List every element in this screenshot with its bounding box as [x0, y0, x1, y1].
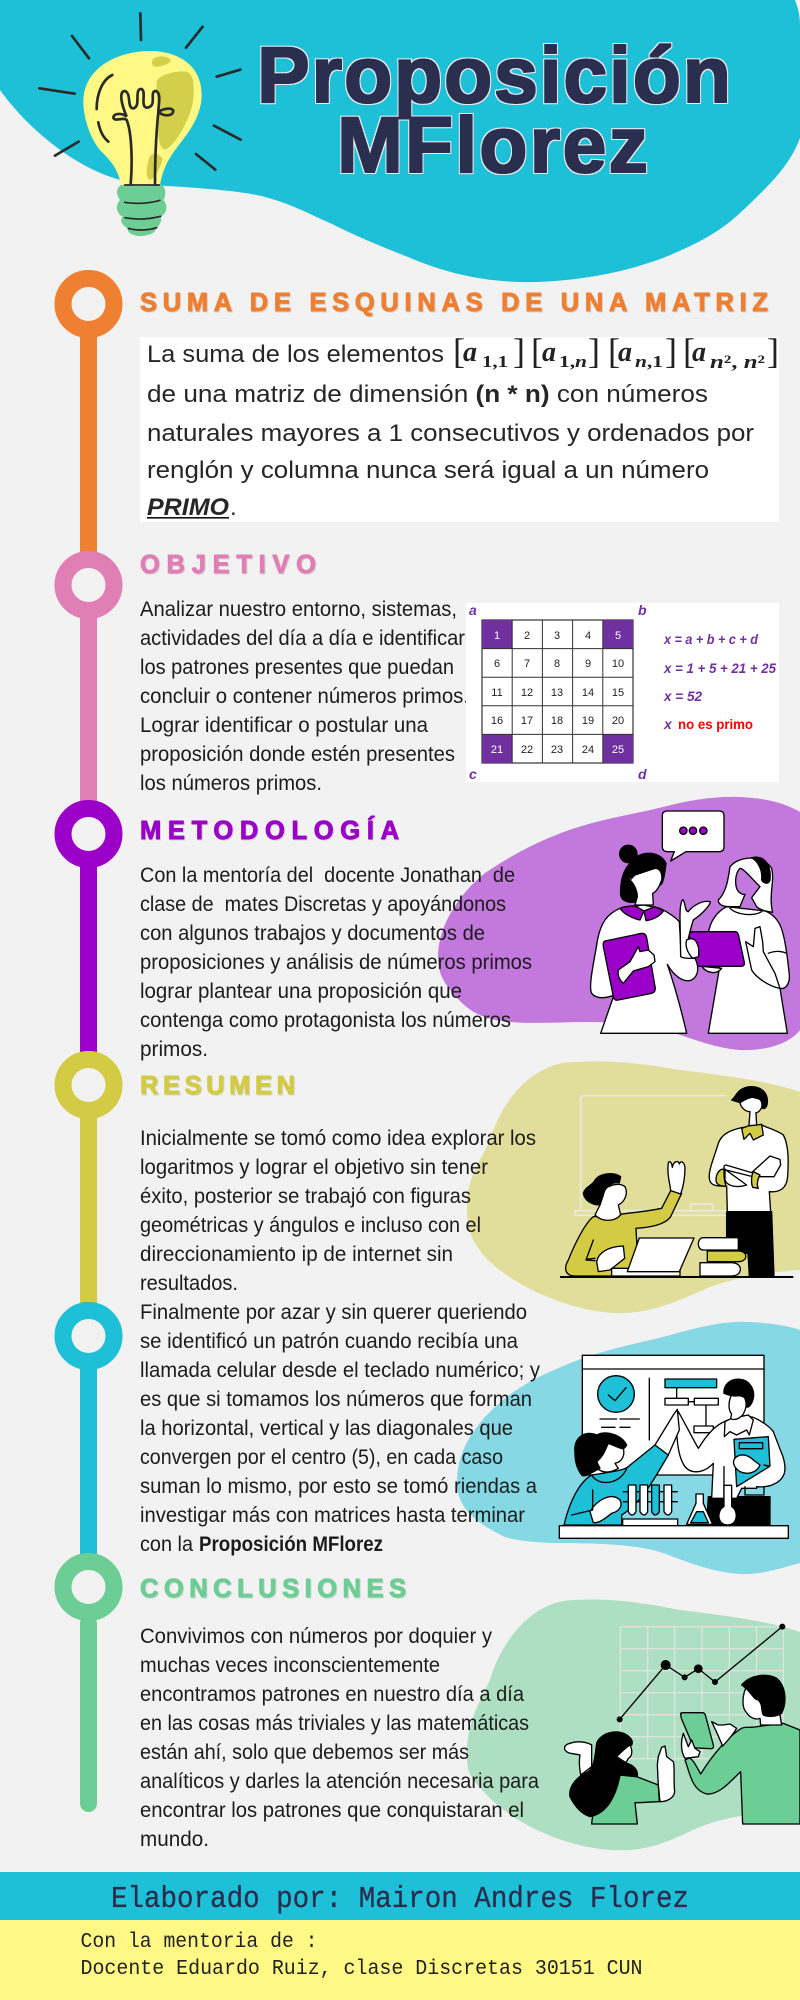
student: [566, 1162, 685, 1276]
text: conclusiones: [140, 1625, 539, 1851]
timeline node: blue: [63, 1310, 114, 1362]
math corners: [: [608, 331, 620, 371]
formula: x = 1 + 5 + 21 + 25: [663, 660, 776, 676]
lab bench: [559, 1526, 788, 1538]
statement text: [147, 341, 754, 521]
speech bubble: [662, 811, 724, 861]
timeline node: pink: [63, 560, 114, 610]
illustration: two women talking: [591, 811, 789, 1033]
bulb glass: [83, 51, 202, 185]
text: resumen: éxito, posterior se trabajó con figuras: [140, 1185, 471, 1208]
matrix grid: 8: [554, 658, 560, 670]
text: metodologia: proposiciones y análisis de números primos: [140, 951, 532, 974]
title: MFlorez: [337, 100, 648, 189]
text: resumen: es que si tomamos los números que forman: [140, 1388, 532, 1411]
timeline node: green: [63, 1562, 114, 1612]
text: resumen: llamada celular desde el teclado numérico; y: [140, 1359, 540, 1382]
text: resumen: direccionamiento ip de internet sin: [140, 1243, 453, 1266]
whiteboard: [575, 1096, 727, 1215]
text: objetivo: los patrones presentes que puedan: [140, 656, 454, 679]
title: [257, 30, 731, 189]
corner labels: c: [469, 766, 477, 782]
matrix grid: 12: [521, 687, 533, 699]
formula: x: [663, 716, 673, 732]
matrix grid: 13: [551, 687, 563, 699]
icon: light bulb: [39, 13, 241, 236]
mentor text: [80, 1930, 642, 1981]
matrix grid: 25: [612, 744, 624, 756]
text: metodologia: Con la mentoría del docente Jonathan de: [140, 864, 515, 887]
math corners: [453, 331, 779, 373]
illustration: two people with chart: [564, 1624, 800, 1824]
scientist assistant woman: [564, 1409, 679, 1525]
text: conclusiones: encontramos patrones en nuestro día a día: [140, 1683, 524, 1706]
text: objetivo: Lograr identificar o postular una: [140, 714, 428, 737]
matrix grid: 21: [491, 744, 503, 756]
footer band: mentor: [0, 1920, 800, 2000]
matrix grid: 17: [521, 715, 533, 727]
timeline: yellow stem: [80, 1110, 97, 1310]
math corners: 1,1: [482, 352, 508, 371]
bulb shading: [147, 56, 194, 180]
math corners: a: [692, 337, 706, 368]
bulb filament: [97, 75, 173, 184]
matrix grid: 15: [612, 687, 624, 699]
scientist: [677, 1379, 785, 1525]
formula: x = 52: [663, 688, 702, 704]
math corners: a: [542, 337, 556, 368]
matrix grid: 10: [612, 658, 624, 670]
matrix grid: 18: [551, 715, 563, 727]
heading: conclusiones: CONCLUSIONES: [140, 1575, 406, 1603]
text: conclusiones: en las cosas más triviales y las matemáticas: [140, 1712, 529, 1735]
math corners: ]: [513, 331, 525, 371]
matrix grid: 23: [551, 744, 563, 756]
text: resumen: investigar más con matrices hasta terminar: [140, 1504, 525, 1527]
yellow blob: [467, 1061, 800, 1313]
formula: x = a + b + c + d: [663, 631, 758, 647]
chart grid: [620, 1627, 783, 1759]
man: [681, 1675, 800, 1824]
text: resumen: geométricas y ángulos e incluso con el: [140, 1214, 481, 1237]
text: resumen: logaritmos y lograr el objetivo sin tener: [140, 1156, 488, 1179]
math corners: [: [453, 331, 465, 371]
text: objetivo: actividades del día a día e identificar: [140, 627, 465, 650]
right woman: [689, 857, 789, 1033]
statement text: de una matriz de dimensión (n * n) con números: [147, 381, 708, 408]
corner labels: a: [469, 602, 477, 618]
math corners: [: [683, 331, 695, 371]
text: conclusiones: Convivimos con números por doquier y: [140, 1625, 492, 1648]
heading: metodologia: METODOLOGÍA: [140, 816, 399, 845]
matrix grid: 16: [491, 715, 503, 727]
text: resumen: Finalmente por azar y sin querer queriendo: [140, 1301, 527, 1324]
text: objetivo: los números primos.: [140, 772, 322, 795]
formula: [663, 631, 776, 732]
chart line: [617, 1624, 785, 1722]
math corners: ]: [665, 331, 677, 371]
matrix grid: 3: [554, 630, 560, 642]
matrix grid: 5: [615, 630, 621, 642]
woman: [564, 1732, 675, 1824]
matrix grid: 7: [524, 658, 530, 670]
matrix grid: 6: [494, 658, 500, 670]
math corners: n², n²: [710, 352, 765, 373]
text: resumen: la horizontal, vertical y las diagonales que: [140, 1417, 513, 1440]
matrix grid: 24: [582, 744, 594, 756]
matrix grid: [482, 620, 633, 763]
text: conclusiones: encontrar los patrones que conquistaran el: [140, 1799, 524, 1822]
statement text: PRIMO: [147, 494, 229, 521]
matrix grid: 11: [491, 687, 503, 699]
math corners: [: [531, 331, 543, 371]
text: conclusiones: analíticos y darles la atención necesaria para: [140, 1770, 539, 1793]
matrix grid: 19: [582, 715, 594, 727]
books: [698, 1238, 746, 1276]
timeline: orange stem: [80, 330, 97, 560]
heading: suma de esquinas: SUMA DE ESQUINAS DE UNA MATRIZ: [140, 289, 768, 317]
text: resumen: Inicialmente se tomó como idea explorar los: [140, 1127, 536, 1150]
left woman: [591, 845, 710, 1033]
text: metodologia: con algunos trabajos y documentos de: [140, 922, 485, 945]
timeline node: yellow: [63, 1060, 114, 1110]
text: conclusiones: están ahí, solo que debemos ser más: [140, 1741, 469, 1764]
green blob: [467, 1599, 800, 1850]
corner labels: b: [638, 602, 647, 618]
bulb base: [117, 184, 166, 236]
footer band: author: [0, 1872, 800, 1920]
math corners: ]: [588, 331, 600, 371]
statement text: La suma de los elementos: [147, 341, 444, 368]
heading: resumen: RESUMEN: [140, 1072, 295, 1100]
matrix grid: 14: [582, 687, 594, 699]
text: resumen: se identificó un patrón cuando recibía una: [140, 1330, 518, 1353]
text: metodologia: clase de mates Discretas y apoyándonos: [140, 893, 506, 916]
flasks: [687, 1485, 736, 1525]
statement text: .: [230, 494, 237, 521]
text: objetivo: concluir o contener números primos.: [140, 685, 469, 708]
text: metodologia: primos.: [140, 1038, 208, 1061]
title: Proposición: [257, 30, 731, 119]
timeline: green stem: [80, 1615, 97, 1812]
panel: statement: [140, 331, 779, 522]
matrix grid: 2: [524, 630, 530, 642]
purple blob: [438, 797, 800, 1050]
text: resumen: resultados.: [140, 1272, 238, 1295]
blue blob: [457, 1322, 800, 1574]
corner labels: d: [638, 766, 647, 782]
author text: Elaborado por: Mairon Andres Florez: [111, 1882, 689, 1917]
illustration: lab team high five: [559, 1355, 788, 1538]
timeline node: orange: [63, 278, 114, 330]
text: metodologia: contenga como protagonista los números: [140, 1009, 511, 1032]
presentation board: [582, 1355, 764, 1475]
bulb rays: [39, 13, 241, 170]
matrix grid: 1: [494, 630, 500, 642]
text: resumen: convergen por el centro (5), en cada caso: [140, 1446, 503, 1469]
timeline: blue stem: [80, 1360, 97, 1560]
laptop: [612, 1238, 694, 1276]
heading: objetivo: OBJETIVO: [140, 551, 316, 579]
matrix grid: 22: [521, 744, 533, 756]
text: objetivo: Analizar nuestro entorno, sistemas,: [140, 598, 457, 621]
illustration: teacher and student: [560, 1087, 793, 1278]
header blob: [0, 0, 800, 282]
text: conclusiones: muchas veces inconscientemente: [140, 1654, 440, 1677]
math corners: a: [463, 337, 477, 368]
matrix grid: 9: [585, 658, 591, 670]
statement text: naturales mayores a 1 consecutivos y ordenados por: [147, 420, 754, 447]
statement text: renglón y columna nunca será igual a un número: [147, 457, 709, 484]
test tubes: [623, 1485, 678, 1526]
timeline: pink stem: [80, 610, 97, 810]
timeline node: purple: [63, 808, 114, 860]
matrix grid: 20: [612, 715, 624, 727]
table line: [560, 1276, 793, 1278]
text: metodologia: lograr plantear una proposición que: [140, 980, 462, 1003]
corner labels: [469, 602, 647, 782]
text: objetivo: [140, 598, 469, 795]
math corners: n,1: [635, 352, 663, 371]
matrix grid: 4: [585, 630, 591, 642]
text: resumen: con la: [140, 1533, 193, 1556]
text: objetivo: proposición donde estén presentes: [140, 743, 455, 766]
timeline: purple stem: [80, 860, 97, 1060]
formula: no es primo: [678, 717, 753, 732]
mentor text: Docente Eduardo Ruiz, clase Discretas 30151 CUN: [80, 1957, 642, 1981]
text: resumen: Proposición MFlorez: [199, 1533, 383, 1556]
text: metodologia: [140, 864, 532, 1061]
math corners: 1,n: [559, 352, 587, 371]
text: conclusiones: mundo.: [140, 1828, 209, 1851]
text: resumen: suman lo mismo, por esto se tomó riendas a: [140, 1475, 537, 1498]
teacher: [709, 1087, 788, 1276]
math corners: a: [618, 337, 632, 368]
text: resumen: [140, 1127, 540, 1556]
mentor text: Con la mentoria de :: [80, 1930, 318, 1954]
panel: matrix example: [466, 602, 779, 782]
math corners: ]: [767, 331, 779, 371]
